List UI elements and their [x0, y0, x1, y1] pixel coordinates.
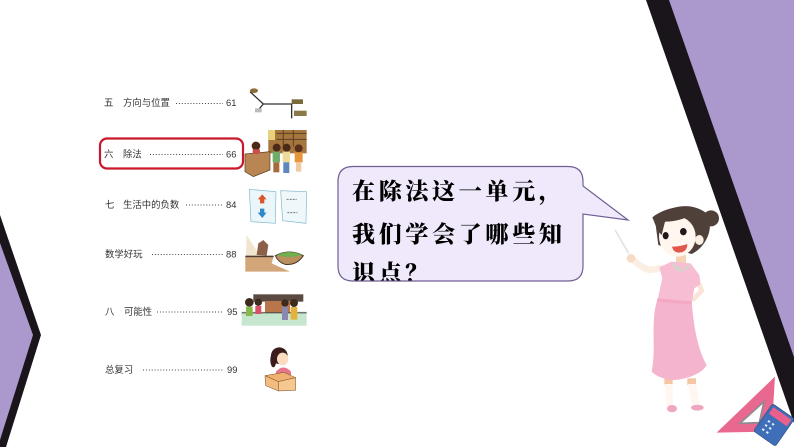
highlighted row: division — [100, 138, 243, 168]
icon: girl with box — [265, 347, 296, 391]
bubble text: 我们学会了哪些知 — [352, 221, 566, 247]
icon: calculator book — [754, 404, 794, 446]
row: possibility: 可能性 — [124, 306, 152, 317]
row: direction and position: 61 — [226, 97, 236, 108]
row: fun math — [105, 248, 236, 260]
row: direction and position — [104, 97, 236, 108]
neck — [676, 255, 686, 265]
bubble text: 在除法这一单元， — [352, 179, 566, 206]
row: negative numbers: 七 — [105, 199, 114, 210]
legs and socks — [664, 378, 704, 412]
highlighted row: division: 六 — [104, 148, 113, 160]
bubble text — [352, 179, 566, 286]
arms — [627, 254, 702, 299]
left arrow decoration — [0, 215, 41, 447]
teacher character — [615, 206, 719, 412]
row: negative numbers: 生活中的负数 — [123, 199, 180, 210]
right corner decoration — [646, 0, 794, 423]
icon: cliff scene — [245, 235, 303, 272]
icon: shelter scene — [242, 294, 307, 326]
icon: temperature notes — [249, 189, 307, 223]
bubble text: 识点？ — [352, 260, 432, 286]
row: possibility: 八 — [105, 306, 115, 317]
row: general review: 99 — [227, 364, 237, 375]
row: possibility — [105, 306, 237, 317]
highlighted row: division: 66 — [226, 148, 236, 160]
row: possibility: 95 — [227, 306, 237, 317]
pointer — [615, 230, 629, 253]
row: general review: 总复习 — [105, 364, 133, 375]
dress — [652, 262, 707, 380]
head — [652, 206, 719, 257]
row: fun math: 数学好玩 — [105, 248, 143, 260]
row: fun math: 88 — [226, 248, 236, 260]
row: direction and position: 方向与位置 — [123, 97, 170, 108]
row: negative numbers: 84 — [226, 199, 236, 210]
table of contents — [100, 97, 243, 375]
row: negative numbers — [105, 199, 236, 210]
triangle ruler — [717, 377, 775, 433]
speech bubble — [338, 166, 628, 286]
row: direction and position: 五 — [104, 97, 113, 108]
highlighted row: division: 除法 — [123, 148, 142, 160]
icon: direction map — [250, 88, 307, 118]
icon: bookstore scene — [245, 130, 307, 177]
row: general review — [105, 364, 237, 375]
